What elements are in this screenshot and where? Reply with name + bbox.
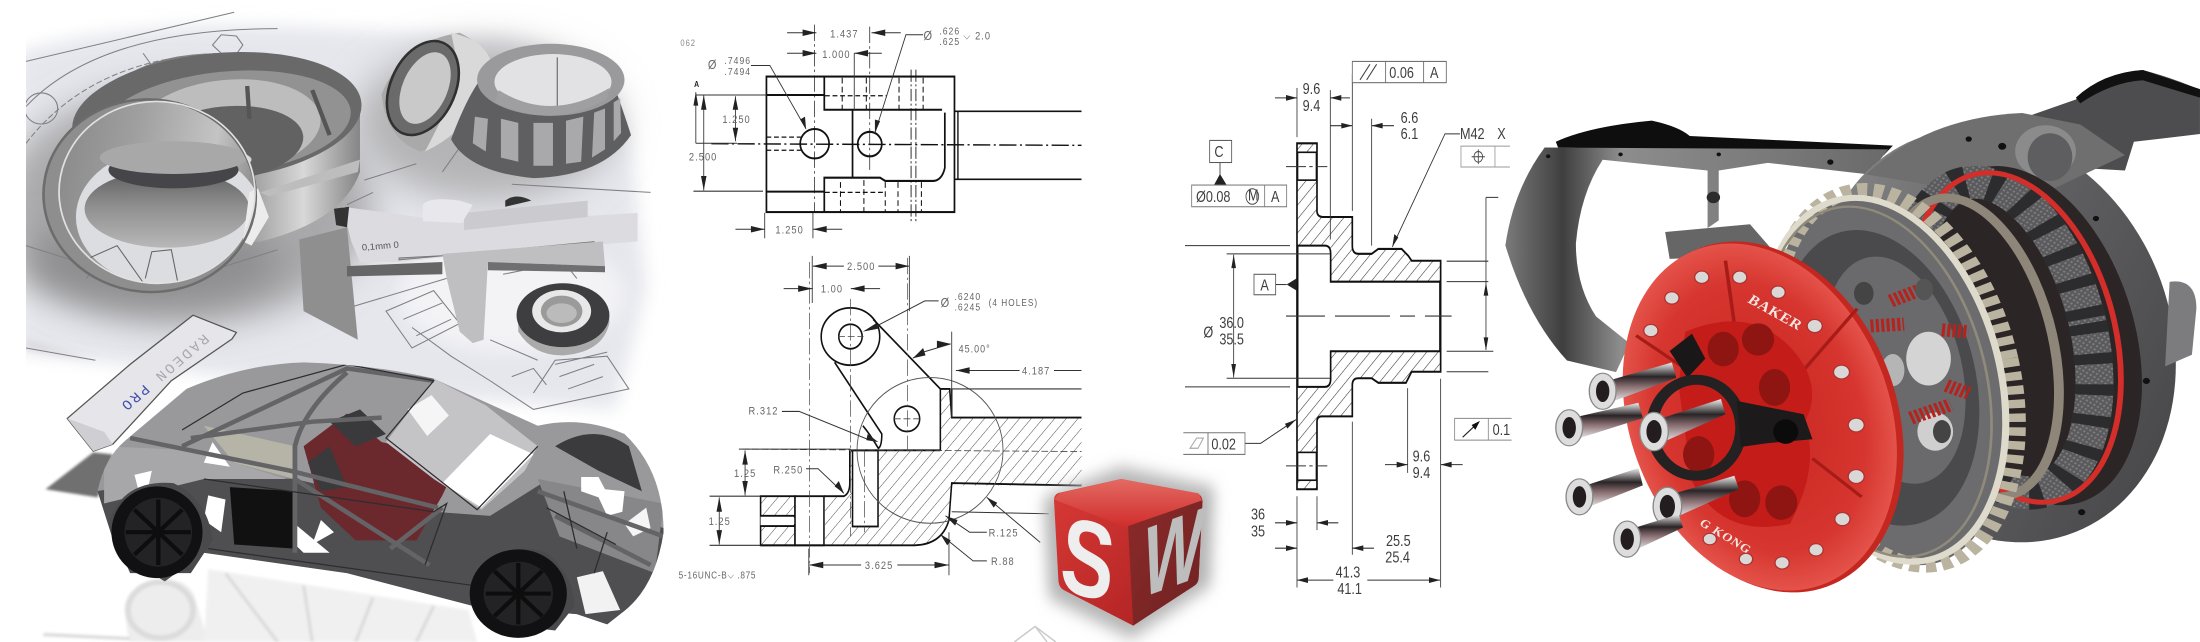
- flatness frame: [1183, 433, 1245, 454]
- plate bolt holes: [1644, 271, 1864, 569]
- lower view dimension text: 5-16UNC-B⌵ .875: [679, 570, 756, 581]
- upper view dimension text: ⌵ 2.0: [963, 31, 991, 43]
- runout frame: [1455, 418, 1512, 440]
- photo backdrop with faded vignette: [0, 26, 646, 409]
- flatness frame: 0.02: [1211, 436, 1236, 454]
- left primary housing with belt cover: [1505, 121, 1893, 372]
- icon: SolidWorks SW cube logo: W: [1137, 485, 1209, 621]
- flange section outline: [1297, 143, 1441, 489]
- chrome pull rods: [1556, 362, 1739, 557]
- panel: bearings, caliper and transparent race car: [0, 12, 664, 642]
- lower view dimension text: [679, 262, 1050, 581]
- upper-right arm: [2027, 70, 2200, 171]
- upper view dimension text: A: [694, 79, 700, 89]
- icon: tapered roller bearing: [451, 44, 631, 178]
- lower view dimension text: 2.500: [847, 262, 875, 273]
- upper view dimension text: 2.500: [689, 152, 717, 164]
- car lower body: [98, 478, 664, 624]
- runout frame: 0.1: [1493, 422, 1510, 439]
- upper view dimension text: 1.250: [722, 115, 751, 126]
- car front wheel: [470, 549, 575, 638]
- right housing body: [1769, 98, 2200, 574]
- flange dimension text: 6.6: [1401, 110, 1418, 127]
- upper view dimension lines: [693, 33, 923, 238]
- plate lettering: BAKER: [1745, 293, 1805, 334]
- datum C and position frame: [1192, 140, 1287, 207]
- icon: SolidWorks SW cube logo: S: [1056, 494, 1119, 626]
- upper view dimension text: .625: [939, 36, 960, 48]
- icon: foreground bearing race: [42, 98, 269, 294]
- car roll cage: [130, 368, 664, 565]
- flange dimension text: 41.1: [1337, 581, 1362, 598]
- panel: flange drawing with GD&T: [1183, 61, 1512, 598]
- tolerance frame: parallelism: [1352, 61, 1446, 83]
- upper view dimension text: .626: [939, 26, 960, 38]
- datum C and position frame: C: [1214, 144, 1223, 162]
- lower view dimension text: 45.00°: [959, 344, 991, 356]
- lower view dimension text: 1.00: [821, 284, 843, 296]
- lower view dimension lines: [710, 256, 1082, 575]
- upper orthographic view: [711, 25, 1082, 221]
- red pressure plate: [1582, 216, 1944, 618]
- upper view dimension text: [680, 26, 991, 237]
- lower view dimension text: 1.25: [709, 516, 731, 528]
- lower view dimension text: 4.187: [1022, 366, 1050, 378]
- icon: deep groove ball bearing: [517, 283, 609, 355]
- flange dimension text: 9.4: [1413, 465, 1430, 482]
- icon: angled small bearing: [373, 31, 492, 151]
- tolerance frame: parallelism: A: [1430, 65, 1439, 82]
- arrowheads: [1214, 95, 1488, 583]
- lower view dimension text: (4 HOLES): [989, 298, 1038, 308]
- datum C and position frame: Ø0.08: [1196, 189, 1231, 207]
- datum A: A: [1260, 277, 1269, 295]
- lower view arrowheads: [716, 263, 997, 568]
- lower view dimension text: 1.25: [734, 468, 756, 480]
- ground reflection under car: [43, 569, 477, 642]
- upper view dimension text: .7494: [724, 66, 751, 78]
- lower view dimension text: 3.625: [865, 560, 893, 572]
- flange dimension text: [1203, 81, 1430, 598]
- red pressure plate: G KONG: [1697, 516, 1755, 556]
- flange dimension text: 9.6: [1413, 448, 1430, 466]
- flange dimension text: 35.5: [1219, 331, 1244, 349]
- car rear wing with lettering: RADEON PRO: [115, 330, 211, 414]
- datum C and position frame: M: [1248, 187, 1259, 205]
- blueprint sketch lines: [25, 12, 651, 409]
- upper view dimension text: .7496: [724, 55, 751, 67]
- flange dimension text: 41.3: [1336, 564, 1360, 582]
- lower view dimension text: .6240: [954, 291, 981, 303]
- upper view dimension text: 062: [680, 37, 696, 48]
- upper view dimension text: 1.250: [775, 225, 804, 237]
- car engine bay: [555, 434, 642, 491]
- flange dimension text: 25.4: [1385, 549, 1410, 567]
- lower view dimension text: Ø: [941, 295, 950, 310]
- thread callout: M42: [1460, 126, 1485, 144]
- flange dimension text: 36.0: [1219, 315, 1244, 332]
- clutch interior springs and pressure hub: [1752, 215, 2007, 541]
- upper view dimension text: 1.000: [822, 49, 851, 61]
- car windshield: [386, 379, 538, 510]
- flange dimension text: 25.5: [1386, 533, 1411, 551]
- car rear wheel: [108, 483, 213, 578]
- transparent race car: [67, 315, 664, 639]
- icon: large cylindrical roller bearing: [65, 39, 368, 250]
- lower view dimension text: .6245: [954, 302, 981, 314]
- datum A: [1254, 274, 1287, 295]
- silver ring gear: [1728, 172, 2052, 584]
- centre lines and extension lines: [1185, 74, 1498, 587]
- clutch basket with red band: [1861, 157, 2151, 518]
- icon: SolidWorks SW cube logo: [1014, 467, 1214, 642]
- icon: vernier caliper: 0,1mm 0: [361, 240, 399, 252]
- flange dimension text: 36: [1251, 506, 1265, 524]
- flange dimension text: Ø: [1203, 325, 1213, 342]
- car red seat: [304, 413, 460, 540]
- thread callout: [1460, 126, 1510, 167]
- datum C and position frame: A: [1271, 189, 1280, 207]
- thread callout: X: [1497, 126, 1506, 144]
- car roof decal: [408, 395, 449, 436]
- upper view dimension text: Ø: [923, 28, 933, 43]
- car rear wing shadow: [46, 452, 113, 497]
- upper view dimension text: 1.437: [830, 29, 859, 41]
- upper view dimension text: Ø: [708, 57, 717, 72]
- lower view dimension text: R.88: [991, 556, 1015, 568]
- flange dimension text: 35: [1251, 523, 1265, 541]
- panel: exploded red Baker clutch assembly: [1505, 70, 2200, 618]
- black lifter hub: [1652, 334, 1812, 476]
- lower sectional view: [742, 258, 1082, 573]
- flange dimension text: 6.1: [1401, 126, 1418, 144]
- upper view arrowheads: [693, 29, 885, 233]
- lower view dimension text: R.250: [773, 465, 803, 477]
- lower view dimension text: R.125: [989, 528, 1019, 540]
- tolerance frame: parallelism: 0.06: [1389, 65, 1414, 82]
- flange dimension text: 9.6: [1303, 81, 1320, 99]
- car rear wing with lettering: [67, 315, 236, 451]
- lower view dimension text: R.312: [749, 406, 778, 418]
- flange dimension text: 9.4: [1303, 98, 1320, 115]
- icon: vernier caliper: [299, 197, 638, 343]
- panel: dimensioned mechanical drawing: [679, 25, 1082, 581]
